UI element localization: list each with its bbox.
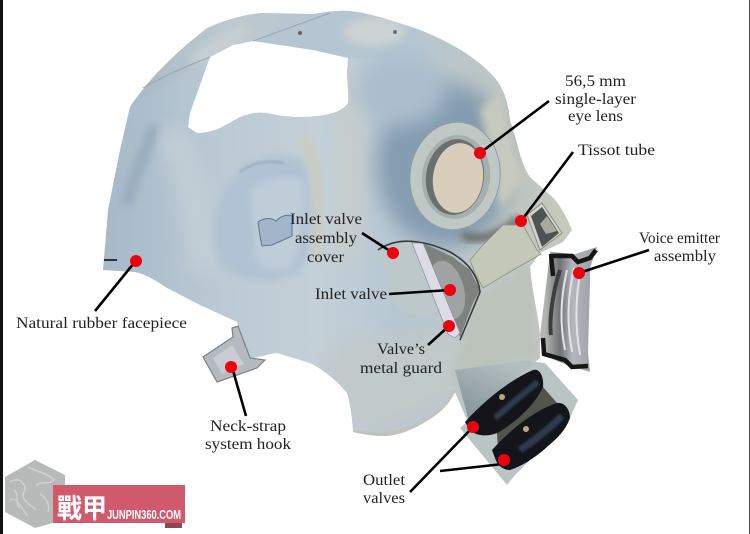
facepiece silhouette (103, 11, 572, 436)
valve disc (423, 257, 471, 323)
rivet marks (298, 30, 397, 35)
interior light (540, 216, 557, 234)
logo tab (165, 522, 182, 528)
edge slit (104, 259, 117, 261)
label: inlet valve assembly cover: assembly (295, 230, 357, 247)
label: voice emitter: assembly (654, 248, 716, 265)
top profile (551, 250, 596, 276)
label: inlet valve: Inlet valve (315, 286, 387, 303)
hook highlight (213, 345, 244, 374)
label: hook: Neck-strap (210, 418, 286, 435)
label: hook: system hook (205, 436, 291, 453)
outer ring (403, 116, 507, 236)
right dark edge (749, 0, 750, 534)
label: outlet valves: valves (363, 490, 405, 507)
red marker dots (130, 147, 585, 466)
metal guard (412, 243, 460, 338)
lower outlet valve (492, 403, 570, 470)
tube end frame (527, 203, 562, 250)
mounting plate (460, 362, 578, 485)
logo banner (53, 485, 185, 523)
emitter ribs (561, 268, 581, 355)
label: eye lens: single-layer (555, 91, 637, 108)
label: inlet valve assembly cover (290, 211, 362, 266)
dark seat (421, 135, 489, 219)
label: outlet valves: Outlet (363, 472, 406, 489)
assembly cover (378, 241, 455, 333)
label: metal guard: metal guard (360, 360, 442, 377)
upper valve highlight (495, 382, 538, 418)
mid ring (416, 131, 496, 223)
natural rubber facepiece (103, 11, 572, 436)
upper outlet valve (465, 370, 543, 435)
label: inlet valve assembly cover: cover (307, 249, 345, 266)
lower valve highlight (520, 416, 562, 450)
tube body (470, 225, 541, 288)
tube interior (531, 207, 559, 247)
label: facepiece: Natural rubber facepiece (16, 315, 187, 332)
label: metal guard (360, 341, 442, 377)
left black edge (0, 0, 3, 534)
hook plate (203, 326, 265, 382)
logo hexagon (5, 460, 65, 528)
label: inlet valve assembly cover: Inlet valve (290, 211, 362, 228)
ear moulding (213, 135, 319, 281)
tissot tube (470, 203, 562, 288)
label: voice emitter (639, 230, 721, 265)
rubber housing (455, 360, 540, 425)
lens (428, 140, 488, 216)
label: tissot tube: Tissot tube (578, 142, 655, 159)
hexagon texture (10, 467, 54, 516)
band fold edge (143, 13, 330, 88)
valve knobs (499, 394, 529, 432)
gap between valves (497, 387, 557, 452)
outlet valve assembly (455, 360, 578, 485)
label: voice emitter: Voice emitter (639, 230, 721, 247)
neck-strap hook (203, 326, 265, 382)
eye socket shadow (462, 218, 520, 238)
logo chinese mark: 戰甲 (57, 494, 107, 524)
facepiece shading (126, 11, 540, 435)
label: eye lens: eye lens (568, 108, 623, 125)
inlet valve area (378, 241, 480, 340)
label: eye lens (555, 73, 637, 125)
bottom profile (543, 338, 588, 367)
label: outlet valves (363, 472, 406, 507)
inner dark strut (550, 270, 560, 335)
voice emitter assembly (540, 247, 597, 372)
opening rim (378, 241, 480, 340)
eye lens assembly (403, 116, 507, 236)
emitter body (540, 247, 597, 372)
label: metal guard: Valve’s (377, 341, 425, 358)
leader lines (95, 101, 649, 492)
logo url: JUNPIN360.COM (107, 508, 181, 522)
label: hook (205, 418, 291, 453)
watermark logo (5, 460, 185, 528)
opening interior (423, 243, 480, 337)
label: eye lens: 56,5 mm (565, 73, 626, 90)
